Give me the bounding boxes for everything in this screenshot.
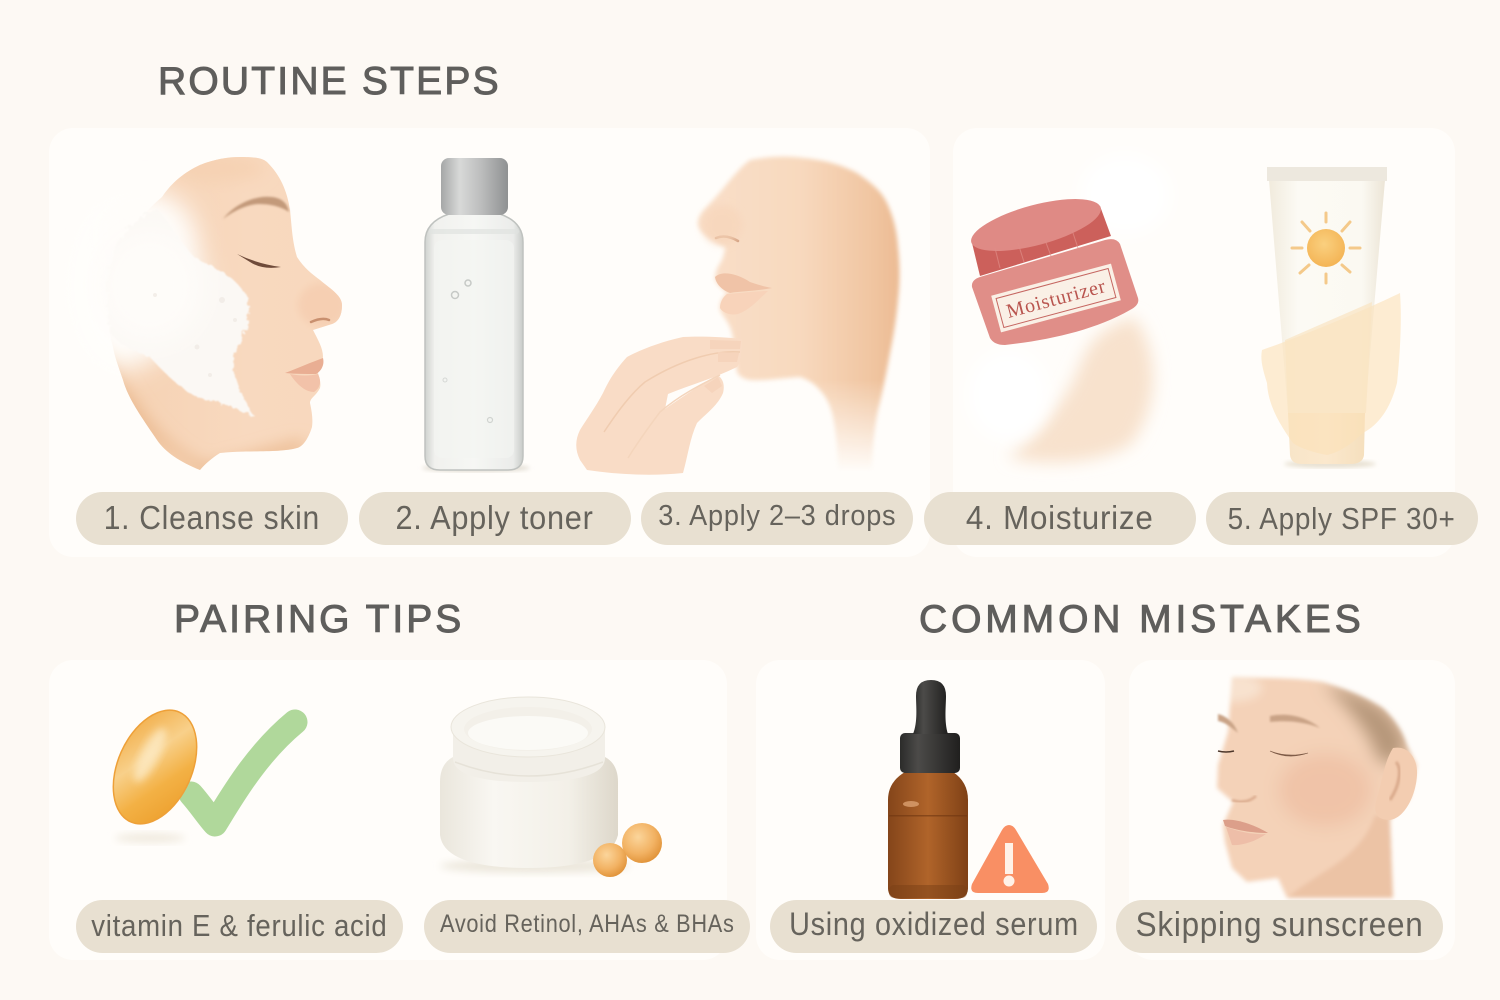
foam (75, 190, 254, 416)
label: step 2: 2. Apply toner (396, 499, 594, 536)
icon: vitamin E capsule and check mark (97, 697, 295, 843)
icon: sun (1292, 213, 1360, 283)
heading: common mistakes: COMMON MISTAKES (919, 598, 1365, 641)
illustration: toner bottle (422, 158, 530, 472)
label: step 5: 5. Apply SPF 30+ (1228, 501, 1456, 536)
label: skipping sunscreen mistake: Skipping sunscreen (1136, 906, 1423, 944)
label: vitamin E tip (76, 900, 403, 953)
label: oxidized serum mistake: Using oxidized serum (789, 906, 1078, 942)
panel: pairing tips (49, 660, 727, 960)
illustration: face without sunscreen (1214, 675, 1419, 900)
panel: mistake sunscreen (1129, 660, 1455, 960)
illustration: sunscreen tube (1261, 167, 1401, 468)
label: step 4: 4. Moisturize (966, 499, 1154, 536)
label: step 1 (76, 492, 348, 545)
label: skipping sunscreen mistake (1116, 900, 1443, 953)
label: step 2 (359, 492, 631, 545)
label: step 1: 1. Cleanse skin (104, 499, 320, 536)
label: avoid actives tip: Avoid Retinol, AHAs & BHAs (440, 910, 734, 938)
illustration: moisturizer jar (966, 155, 1170, 463)
label: step 5 (1206, 492, 1478, 545)
label: moisturizer: Moisturizer (1004, 275, 1108, 323)
label: avoid actives tip (424, 900, 750, 953)
label: vitamin E tip: vitamin E & ferulic acid (91, 908, 388, 943)
label: oxidized serum mistake (770, 900, 1097, 953)
illustration: face with cleansing foam (114, 157, 342, 470)
illustration: cream jar with capsules (440, 697, 662, 877)
heading: pairing tips: PAIRING TIPS (174, 598, 464, 641)
illustration: face profile with hand (576, 157, 900, 475)
icon: capsules (593, 823, 662, 877)
panel: mistake serum (756, 660, 1105, 960)
heading: routine steps: ROUTINE STEPS (158, 60, 501, 103)
label: step 4 (924, 492, 1196, 545)
panel: routine steps 4-5 (953, 128, 1455, 557)
label: step 3: 3. Apply 2–3 drops (658, 500, 896, 532)
icon: hand (576, 337, 742, 475)
icon: warning triangle (971, 825, 1049, 893)
label: step 3 (641, 492, 913, 545)
panel: routine steps 1-3 (49, 128, 930, 557)
illustration: amber serum bottle with warning (888, 680, 1049, 899)
